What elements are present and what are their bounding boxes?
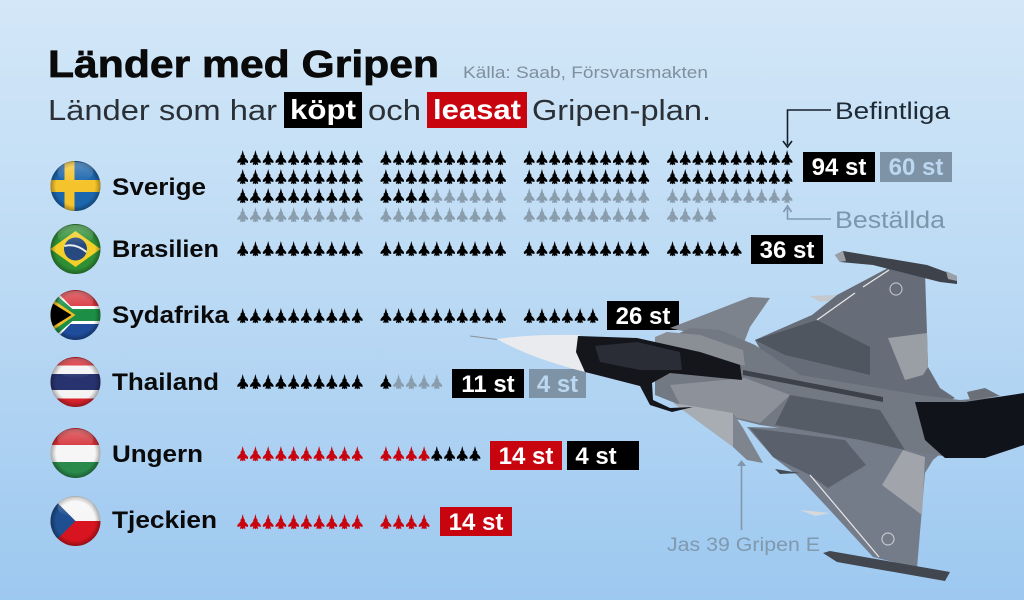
planes: Sydafrika 26: [237, 308, 598, 323]
callout: Jas 39 Gripen E: [667, 460, 820, 556]
upper canard: [670, 297, 770, 345]
row: Sydafrika: [50, 290, 679, 340]
value: 4 st bought: 4 st: [575, 443, 617, 470]
value: 11 st: [452, 369, 524, 398]
value: 36 st: 36 st: [760, 237, 814, 264]
callout: Befintliga: [783, 98, 951, 147]
flag: South Africa: [50, 290, 100, 340]
value: 60 st: 60 st: [889, 154, 943, 181]
flag: Sweden: [50, 161, 100, 211]
label: Brasilien: Brasilien: [112, 236, 219, 263]
row: Brasilien: [50, 224, 823, 274]
value: 4 st: [529, 369, 586, 398]
fighter jet: Jas 39 Gripen E: [470, 251, 1024, 581]
value: 94 st: 94 st: [812, 154, 866, 181]
flag: Czech Republic: [50, 496, 100, 546]
value: 11 st: 11 st: [461, 371, 515, 398]
planes: Ungern 14 and 4: [237, 446, 480, 461]
row: Ungern: [50, 428, 639, 479]
tail section: [915, 393, 1024, 458]
label: Ungern: Ungern: [112, 441, 203, 468]
subtitle: Länder som har: [48, 95, 277, 127]
subtitle: köpt: [290, 94, 356, 125]
fuselage: [655, 328, 1024, 458]
source: Källa: Saab, Försvarsmakten: [463, 63, 708, 82]
flag: Brazil: [50, 224, 100, 274]
lower wing: [747, 427, 950, 581]
label: Sydafrika: Sydafrika: [112, 302, 230, 329]
upper wing: [755, 251, 957, 420]
label: Tjeckien: Tjeckien: [112, 507, 217, 534]
row: Tjeckien: [50, 496, 512, 546]
value: 4 st: 4 st: [537, 371, 578, 398]
subtitle: leasat: [433, 94, 521, 125]
subtitle: [48, 92, 711, 128]
probe: [470, 336, 497, 340]
planes: Tjeckien 14: [237, 514, 429, 529]
flag: Thailand: [50, 357, 100, 407]
value: 4 st bought: [567, 441, 639, 470]
radome: [497, 335, 585, 372]
callout: Beställda: Beställda: [835, 207, 946, 234]
planes: Brasilien 36: [237, 241, 741, 256]
row: Sverige: [50, 150, 952, 222]
title: Länder med Gripen: [48, 44, 439, 86]
planes: Sverige 94 befintliga and 60 beställda: [237, 150, 792, 222]
value: 60 st: [880, 152, 952, 182]
callout: Befintliga: Befintliga: [835, 98, 951, 125]
label: Thailand: Thailand: [112, 369, 219, 396]
callout: Beställda: [784, 206, 946, 234]
subtitle: Gripen-plan.: [532, 95, 711, 127]
planes: Thailand 11 and 4: [237, 374, 442, 389]
lower canard: [673, 403, 763, 463]
label: Sverige: Sverige: [112, 174, 206, 201]
value: 94 st: [803, 152, 875, 182]
subtitle: och: [368, 95, 421, 127]
flag: Hungary: [50, 428, 100, 479]
row: Thailand: [50, 357, 586, 407]
value: 14 st leased: 14 st: [499, 443, 553, 470]
value: 26 st: 26 st: [616, 303, 670, 330]
canopy: [576, 336, 742, 412]
value: 14 st: 14 st: [449, 509, 503, 536]
callout: Jas 39 Gripen E: Jas 39 Gripen E: [667, 535, 820, 556]
